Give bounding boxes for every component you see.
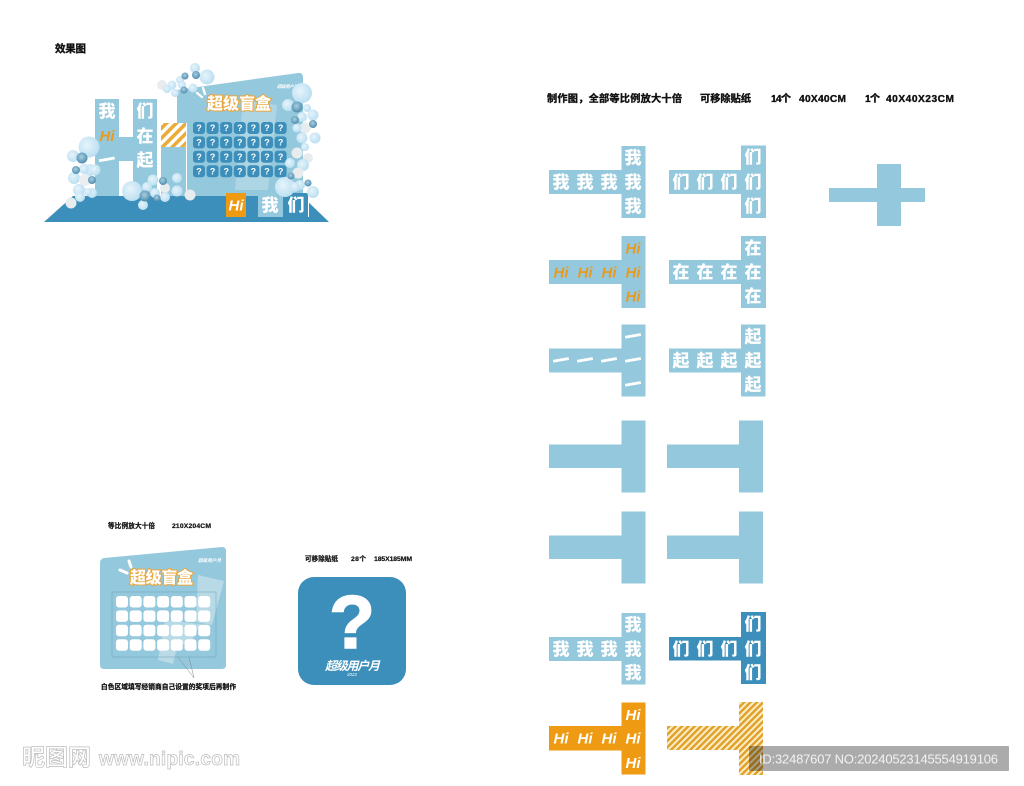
- T panel: 起: 起: [744, 376, 762, 394]
- caption: sticker size: 可移除贴纸: [305, 554, 338, 563]
- tile grid: ?: [264, 166, 270, 176]
- T panel: 起: [669, 324, 766, 396]
- header: production notes: 40X40X23CM: [886, 94, 954, 105]
- tile grid: [193, 122, 287, 177]
- header: production notes: 14个: [771, 93, 792, 105]
- T panel: 我: 我: [600, 173, 618, 192]
- T panel: 们: 们: [744, 173, 762, 192]
- T panel: 们: 们: [744, 197, 762, 216]
- T panel: 在: 在: [672, 263, 690, 282]
- T panel: 们 dark: 们: [696, 640, 714, 659]
- T panel: 我: 我: [624, 173, 642, 192]
- T panel: Hi on orange: Hi: [626, 730, 641, 748]
- T panel: 在: 在: [744, 287, 762, 306]
- T panel: 们 dark: 们: [720, 640, 738, 659]
- back board: [177, 73, 303, 196]
- T panel: Hi on orange: Hi: [578, 730, 593, 748]
- T panel: Hi on orange: Hi: [626, 755, 641, 772]
- board title: 超级盲盒: [130, 568, 193, 587]
- watermark: nipic logo: 昵图网: [22, 744, 91, 770]
- tile grid: ?: [237, 123, 243, 133]
- burst marks: [197, 88, 205, 97]
- front cubes: 们: [288, 196, 304, 215]
- burst marks: [120, 561, 131, 573]
- T panel: 一: 一: [623, 350, 643, 372]
- blank T panel row 5 right: [667, 512, 763, 584]
- T panel: 在: 在: [744, 239, 762, 258]
- T panel: 们 dark: 们: [672, 640, 690, 659]
- T panel: 我 row 6: [549, 613, 646, 684]
- balloons: [66, 63, 320, 210]
- T panel: 我 row 6: 我: [624, 640, 642, 659]
- T panel: Hi orange on blue: Hi: [554, 264, 569, 282]
- H structure text: 我: [98, 102, 116, 121]
- T panel: Hi on orange: Hi: [554, 730, 569, 748]
- T panel: Hi orange on blue: Hi: [578, 264, 593, 282]
- T panel: 在: 在: [696, 263, 714, 282]
- T panel: 我: [549, 146, 646, 218]
- tile grid: ?: [264, 123, 270, 133]
- watermark: image id tag: ID:32487607 NO:20240523145554919106: [759, 752, 998, 766]
- header: production notes: [547, 92, 954, 105]
- T panel: Hi orange on blue: Hi: [626, 288, 641, 306]
- translucent shapes: [158, 575, 224, 664]
- tile grid: ?: [237, 138, 243, 148]
- sticker card with question mark: [298, 577, 406, 685]
- outline frame: [112, 592, 216, 657]
- logo: 超级用户月: [198, 558, 221, 563]
- H structure text: 一: [97, 150, 117, 171]
- tile grid: ?: [251, 152, 256, 162]
- cross panel: [829, 164, 925, 226]
- T panel: 我: 我: [552, 173, 570, 192]
- T panel: 一: 一: [575, 350, 595, 372]
- caption: sticker size: 28个: [351, 555, 366, 563]
- T panel: 起: 起: [696, 352, 714, 370]
- tile grid: ?: [196, 152, 202, 162]
- T panel: 起: 起: [672, 352, 690, 370]
- T panel: 我: 我: [624, 148, 642, 168]
- T panel: 起: 起: [744, 328, 762, 346]
- front cubes: 我: [262, 196, 278, 215]
- effect scene illustration: [44, 63, 329, 222]
- tile grid: ?: [237, 166, 243, 176]
- T panel: 们 dark: 们: [744, 664, 762, 682]
- T panel: Hi orange on blue: Hi: [626, 264, 641, 282]
- T panel: 在: 在: [744, 263, 762, 282]
- tile grid: ?: [223, 166, 229, 176]
- T panel: 我 row 6: 我: [552, 640, 570, 659]
- campaign logo: 超级用户月: [325, 659, 381, 673]
- T panel: 们 dark: 们: [744, 615, 762, 634]
- T panel: 一: 一: [623, 326, 643, 348]
- striped pillar: [161, 123, 187, 196]
- board translucent shape: [235, 100, 277, 190]
- board shape: [100, 547, 226, 669]
- tile grid: ?: [278, 123, 283, 133]
- blank T panel row 5 left: [549, 512, 646, 584]
- T panel: 在: [669, 236, 766, 308]
- H structure text: 在: [136, 127, 154, 146]
- H structure text: [97, 102, 154, 171]
- T panel: 一: 一: [551, 350, 571, 372]
- tile grid: ?: [210, 152, 215, 162]
- tile grid: ?: [210, 166, 215, 176]
- T panel: 一: 一: [599, 350, 619, 372]
- T panel: Hi on orange: Hi: [602, 730, 617, 748]
- floor: [44, 196, 329, 222]
- tile grid: ?: [223, 123, 229, 133]
- tile grid: ?: [237, 152, 243, 162]
- T panel: 在: 在: [720, 263, 738, 282]
- H structure text: Hi: [100, 128, 115, 145]
- T panel: 我 row 6: 我: [600, 640, 618, 659]
- H structure text: 起: [136, 151, 154, 170]
- T panel: Hi on orange: [549, 702, 646, 774]
- callout pointer: [178, 657, 194, 678]
- tile grid: ?: [264, 138, 270, 148]
- tile grid: ?: [251, 138, 256, 148]
- note: white area instructions: 白色区域填写经销商自己设置的奖项后再制作: [101, 682, 236, 691]
- T panel: 我: 我: [576, 173, 594, 192]
- T panel: 起: 起: [720, 352, 738, 370]
- blank T panel row 4 right: [667, 420, 763, 492]
- tile grid: ?: [251, 166, 256, 176]
- tile grid: ?: [278, 152, 283, 162]
- question mark: ?: [329, 580, 375, 664]
- tile grid: ?: [278, 166, 283, 176]
- T panel: 们: 们: [672, 173, 690, 192]
- T panel: 起: 起: [744, 352, 762, 370]
- tile grid: ?: [278, 138, 283, 148]
- H shaped structure: [95, 99, 157, 196]
- T panel: 一: 一: [623, 374, 643, 396]
- T panel: 们: 们: [744, 148, 762, 167]
- board title: 超级盲盒: [207, 94, 271, 113]
- panel: blind box board: [100, 547, 226, 669]
- T panel: 我 row 6: 我: [576, 640, 594, 659]
- T panel: 们: 们: [720, 173, 738, 192]
- header: production notes: 制作图，全部等比例放大十倍: [547, 92, 682, 105]
- year: 2022: [346, 672, 358, 677]
- front cubes: Hi: [228, 198, 244, 214]
- tile grid: ?: [196, 166, 202, 176]
- heading: 效果图: 效果图: [55, 42, 86, 55]
- header: production notes: 40X40CM: [799, 94, 846, 105]
- T panel: 一: [549, 324, 646, 396]
- tile grid: ?: [223, 152, 229, 162]
- caption: sticker size: [305, 554, 412, 563]
- board logo: 超级用户月: [277, 84, 299, 89]
- white tiles: [116, 596, 210, 651]
- T panel: Hi orange on blue: [549, 236, 646, 308]
- tile grid: ?: [196, 138, 202, 148]
- T panel: 我 row 6: 我: [624, 616, 642, 634]
- tile grid: ?: [223, 138, 229, 148]
- T panel: 们 dark: [669, 612, 766, 684]
- caption: sticker size: 185X185MM: [374, 556, 412, 563]
- T panel: 们: 们: [696, 173, 714, 192]
- tile grid: ?: [264, 152, 270, 162]
- watermark: nipic logo: [22, 744, 240, 770]
- front cubes: [226, 192, 309, 217]
- T panel: Hi orange on blue: Hi: [602, 264, 617, 282]
- header: production notes: 1个: [865, 93, 881, 105]
- header: production notes: 可移除贴纸: [700, 92, 751, 105]
- caption: scaled board size: [108, 521, 211, 530]
- caption: scaled board size: 等比例放大十倍: [108, 521, 155, 530]
- T panel: Hi orange on blue: Hi: [626, 240, 641, 258]
- tile grid: ?: [196, 123, 202, 133]
- watermark: image id tag: [749, 746, 1009, 771]
- T panel: 们 dark: 们: [744, 640, 762, 659]
- T panel: 我 row 6: 我: [624, 664, 642, 682]
- T panel: 们: [669, 146, 766, 218]
- H structure text: 们: [136, 102, 154, 121]
- watermark: nipic logo: www.nipic.com: [98, 749, 240, 770]
- T panel: Hi on orange: Hi: [626, 707, 641, 724]
- T panel: striped: [667, 702, 763, 775]
- caption: scaled board size: 210X204CM: [172, 523, 211, 530]
- tile grid: ?: [251, 123, 256, 133]
- T panel: 我: 我: [624, 197, 642, 216]
- tile grid: ?: [210, 123, 215, 133]
- tile grid: ?: [210, 138, 215, 148]
- blank T panel row 4 left: [549, 420, 646, 492]
